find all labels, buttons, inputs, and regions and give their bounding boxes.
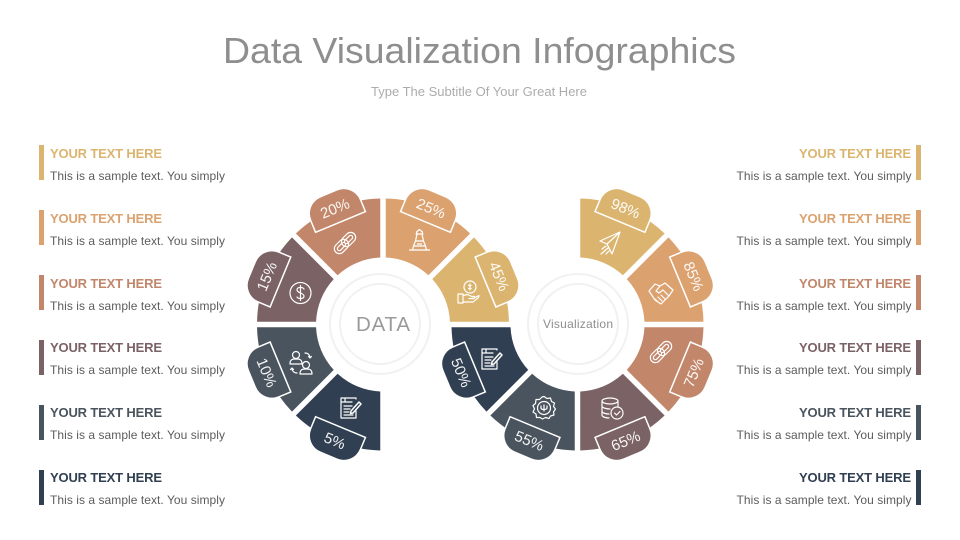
left item 6: This is a sample text. You simply — [50, 493, 225, 507]
right item 2: This is a sample text. You simply — [736, 234, 912, 248]
segment 10% — [234, 306, 342, 421]
left item 2 — [39, 210, 225, 248]
left item 4 — [39, 340, 225, 377]
segment 10%: 10% — [253, 356, 280, 390]
segment 50% — [429, 306, 537, 421]
segment 45%: 45% — [485, 260, 512, 294]
right item 3 — [736, 275, 921, 313]
segment 50%: 50% — [447, 356, 474, 390]
right item 6: YOUR TEXT HERE — [799, 470, 911, 485]
left item 5: YOUR TEXT HERE — [50, 405, 162, 420]
right item 5: YOUR TEXT HERE — [799, 405, 911, 420]
icon: document and pen — [341, 398, 361, 418]
left item 5: This is a sample text. You simply — [50, 428, 225, 442]
segment 45% — [424, 228, 532, 343]
right item 1: This is a sample text. You simply — [736, 169, 912, 183]
right item 3: YOUR TEXT HERE — [799, 276, 911, 291]
icon: handshake — [649, 283, 673, 304]
right item 4 — [736, 340, 921, 377]
segment 85% — [618, 228, 726, 343]
segment 25% — [365, 176, 480, 284]
right item 6: This is a sample text. You simply — [736, 493, 912, 507]
right donut: Visualization — [429, 176, 726, 473]
left item 1: YOUR TEXT HERE — [50, 146, 162, 161]
left item 6: YOUR TEXT HERE — [50, 470, 162, 485]
icon: document and pen right — [482, 349, 502, 369]
right item 1: YOUR TEXT HERE — [799, 146, 911, 161]
left item 3: YOUR TEXT HERE — [50, 276, 162, 291]
icon: dollar coin — [290, 282, 311, 304]
left item 5 — [39, 405, 225, 442]
left item 2: YOUR TEXT HERE — [50, 211, 162, 226]
segment 98%: 98% — [608, 195, 642, 223]
right item 2: YOUR TEXT HERE — [799, 211, 911, 226]
title: Data Visualization Infographics — [223, 30, 736, 71]
right item 1 — [736, 145, 921, 183]
icon: chess piece — [410, 230, 430, 250]
centre label: Visualization: Visualization — [543, 317, 613, 331]
right item 3: This is a sample text. You simply — [736, 299, 912, 313]
right text column — [736, 145, 921, 507]
segment 98% — [559, 176, 674, 284]
segment 15%: 15% — [254, 260, 281, 294]
icon: people exchange — [290, 352, 312, 374]
segment 55% — [481, 365, 596, 473]
centre rings: Visualization — [528, 274, 628, 374]
left item 4: This is a sample text. You simply — [50, 363, 225, 377]
left item 1: This is a sample text. You simply — [50, 169, 225, 183]
left item 2: This is a sample text. You simply — [50, 234, 225, 248]
icon: gear — [533, 396, 556, 419]
right item 2 — [736, 210, 921, 248]
icon: paper plane — [600, 232, 620, 254]
left donut: DATA — [234, 176, 532, 473]
left item 3: This is a sample text. You simply — [50, 299, 225, 313]
left item 4: YOUR TEXT HERE — [50, 340, 162, 355]
icon: hand with coin — [458, 281, 479, 303]
segment 75% — [618, 306, 726, 421]
segment 15% — [234, 228, 342, 343]
icon: link chain — [332, 230, 358, 256]
left text column — [39, 145, 225, 507]
centre rings: DATA — [330, 274, 430, 374]
right item 6 — [736, 470, 921, 507]
segment 25%: 25% — [414, 195, 448, 223]
right item 5 — [736, 405, 921, 442]
right item 5: This is a sample text. You simply — [736, 428, 912, 442]
left item 1 — [39, 145, 225, 183]
segment 65% — [559, 365, 674, 473]
right item 4: This is a sample text. You simply — [736, 363, 912, 377]
segment 85%: 85% — [679, 260, 707, 294]
left item 6 — [39, 470, 225, 507]
segment 5%: 5% — [321, 429, 348, 453]
segment 65%: 65% — [609, 428, 643, 455]
segment 55%: 55% — [512, 428, 546, 455]
icon: link chain right — [648, 339, 674, 365]
right item 4: YOUR TEXT HERE — [799, 340, 911, 355]
left item 3 — [39, 275, 225, 313]
segment 5% — [286, 365, 401, 473]
segment 75%: 75% — [681, 356, 708, 390]
icon: database check — [602, 398, 623, 419]
segment 20% — [286, 176, 401, 284]
centre label: DATA: DATA — [356, 313, 410, 336]
subtitle: Type The Subtitle Of Your Great Here — [371, 84, 587, 99]
segment 20%: 20% — [318, 195, 352, 223]
